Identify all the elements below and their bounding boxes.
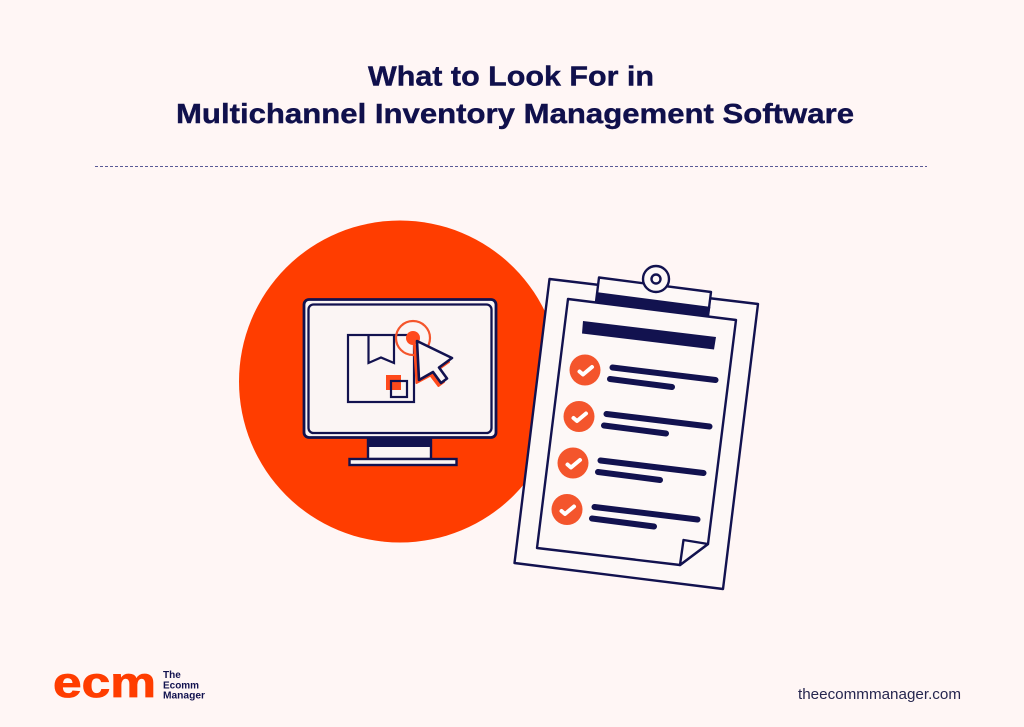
monitor screen (304, 300, 496, 438)
checklist item 1 (570, 354, 716, 387)
clipboard clip (596, 266, 711, 316)
footer website: theecommmanager.com (798, 686, 961, 703)
clipboard paper (537, 299, 736, 565)
checklist item 2 (564, 401, 710, 434)
monitor stand (350, 438, 456, 465)
logo: ecm: The (163, 670, 181, 681)
orange circle (239, 220, 561, 542)
title (176, 60, 854, 129)
logo: ecm: Ecomm (163, 680, 199, 692)
icon: monitor (304, 300, 496, 465)
checklist item 3 (558, 448, 704, 480)
title: What to Look For in (368, 60, 654, 92)
title: Multichannel Inventory Management Software (176, 98, 854, 129)
logo: ecm (53, 659, 205, 707)
icon: click target (396, 321, 430, 355)
icon: package box (348, 335, 414, 402)
logo: ecm: ecm (53, 659, 156, 707)
logo: ecm: Manager (163, 690, 205, 702)
checklist heading bar (582, 321, 716, 350)
icon: cursor (414, 341, 452, 386)
clipboard board (514, 279, 758, 589)
icon: clipboard (514, 266, 758, 589)
checklist item 4 (552, 494, 698, 526)
